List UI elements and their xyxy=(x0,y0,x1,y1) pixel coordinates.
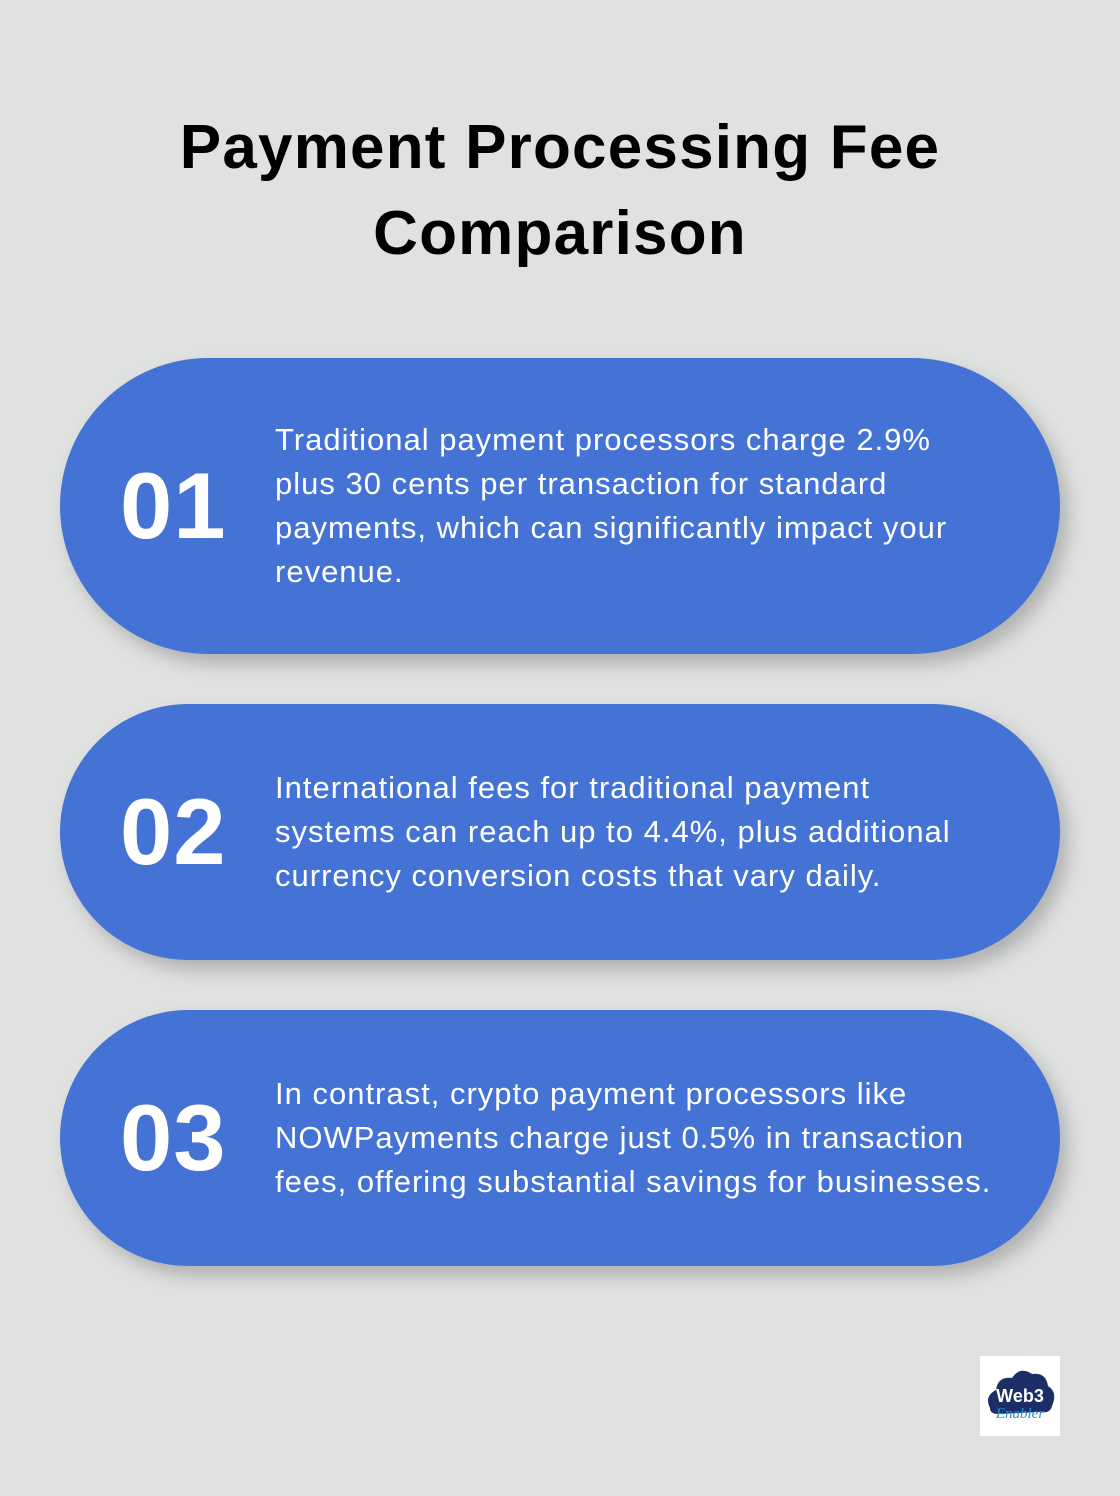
panel: 02 xyxy=(60,704,1060,960)
logo: Web3 xyxy=(996,1386,1044,1406)
logo: Enabler xyxy=(995,1406,1044,1422)
number 03: 03 xyxy=(120,1085,227,1190)
text 02: currency conversion costs that vary daily. xyxy=(275,858,882,893)
title xyxy=(180,113,940,268)
text 02: systems can reach up to 4.4%, plus additional xyxy=(275,814,951,849)
title: Comparison xyxy=(373,199,747,268)
text 01: revenue. xyxy=(275,554,404,589)
text 01: plus 30 cents per transaction for standard xyxy=(275,466,887,501)
text 03: fees, offering substantial savings for businesses. xyxy=(275,1164,991,1199)
text 01 xyxy=(275,422,947,589)
text 01: Traditional payment processors charge 2.9% xyxy=(275,422,931,457)
text 03: In contrast, crypto payment processors like xyxy=(275,1076,907,1111)
number 02: 02 xyxy=(120,779,227,884)
panel: 01 xyxy=(60,358,1060,654)
panel: 03 xyxy=(60,1010,1060,1266)
text 03: NOWPayments charge just 0.5% in transaction xyxy=(275,1120,964,1155)
text 01: payments, which can significantly impact your xyxy=(275,510,947,545)
text 03 xyxy=(275,1076,991,1199)
logo xyxy=(980,1356,1060,1436)
number 01: 01 xyxy=(120,453,227,558)
text 02: International fees for traditional payment xyxy=(275,770,870,805)
title: Payment Processing Fee xyxy=(180,113,940,182)
text 02 xyxy=(275,770,951,893)
